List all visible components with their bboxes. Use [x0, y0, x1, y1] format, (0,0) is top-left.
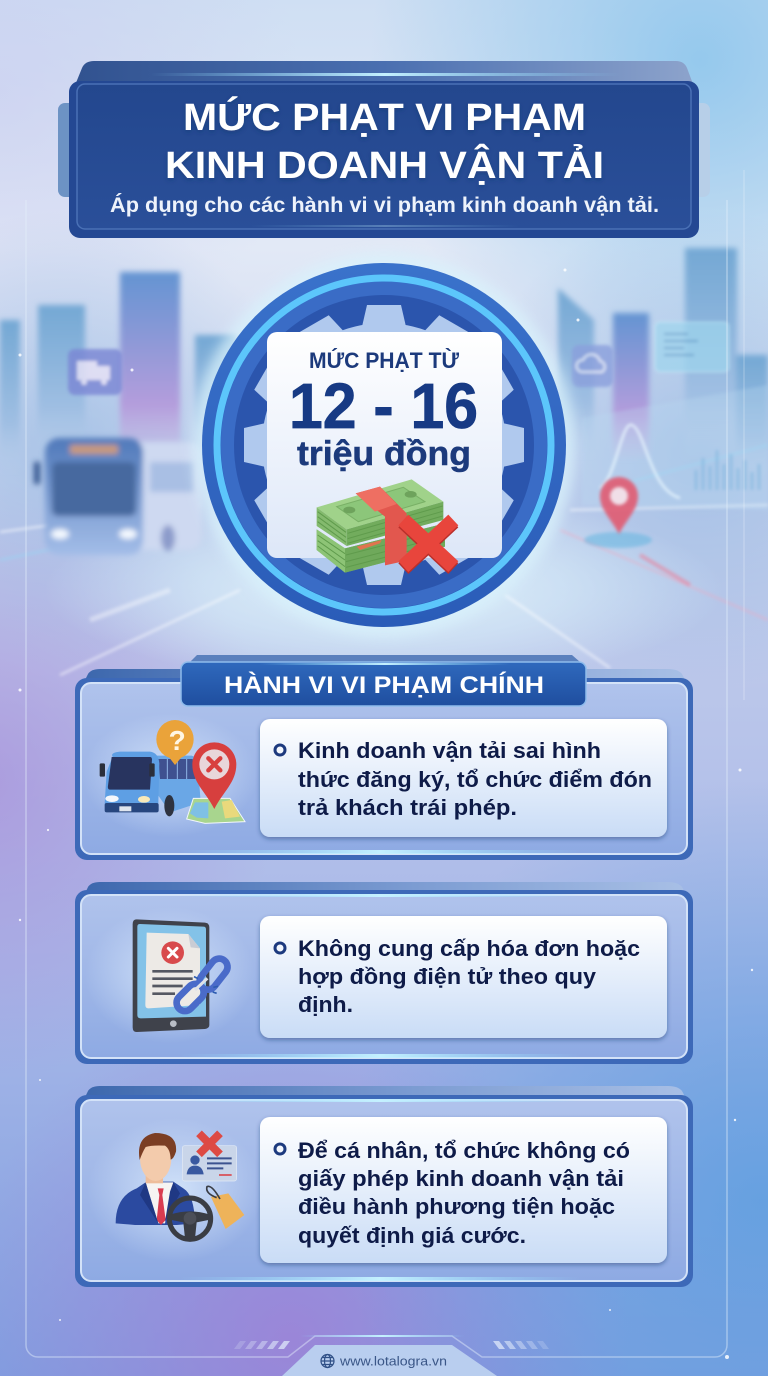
- icon: bus with question bubble and location pin: [100, 720, 245, 823]
- icon: gear: [244, 305, 524, 585]
- background icon tile: truck: [68, 349, 122, 395]
- icon: driver with revoked licence, steering wheel and price tag: [116, 1133, 244, 1239]
- subtitle: Áp dụng cho các hành vi vi phạm kinh doanh vận tải.: [110, 194, 659, 217]
- title panel: [58, 61, 710, 238]
- blurred bus in the background: [34, 438, 202, 555]
- text box 1: trả khách trái phép.: [298, 795, 517, 820]
- text box 2: [260, 916, 667, 1038]
- fine amount card: [267, 332, 502, 558]
- text box 3: quyết định giá cước.: [298, 1223, 526, 1248]
- text box 2: định.: [298, 992, 353, 1017]
- background map pin: [584, 477, 652, 548]
- background data panel: [655, 322, 729, 372]
- text box 3: Để cá nhân, tổ chức không có: [298, 1138, 630, 1163]
- text box 1: [260, 719, 667, 837]
- background icon tile: cloud: [572, 345, 613, 387]
- fine amount value: 12 - 16: [289, 370, 478, 442]
- icon: bus with question bubble and location pin: ?: [169, 725, 186, 756]
- text box 1: thức đăng ký, tổ chức điểm đón: [298, 767, 652, 792]
- title text: KINH DOANH VẬN TẢI: [165, 143, 604, 187]
- panel: violation 2: [75, 882, 693, 1064]
- footer website text: www.lotalogra.vn: [339, 1354, 447, 1368]
- fine amount label: MỨC PHẠT TỪ: [309, 348, 460, 373]
- hash marks right: [493, 1341, 549, 1349]
- icon: tablet with rejected document and broken chain: [133, 919, 231, 1032]
- background chart with wave and bars: [582, 385, 768, 510]
- title text: [165, 95, 604, 187]
- icon: cash stack with red cross: [317, 479, 453, 573]
- text box 3: giấy phép kinh doanh vận tải: [298, 1166, 624, 1191]
- text box 3: điều hành phương tiện hoặc: [298, 1194, 615, 1219]
- text box 1: Kinh doanh vận tải sai hình: [298, 738, 601, 763]
- text box 2: Không cung cấp hóa đơn hoặc: [298, 936, 640, 961]
- fine amount unit: triệu đồng: [297, 435, 471, 473]
- footer tab: [234, 1335, 549, 1376]
- title text: MỨC PHẠT VI PHẠM: [183, 95, 586, 139]
- text box 2: hợp đồng điện tử theo quy: [298, 964, 597, 989]
- section banner: [181, 655, 586, 706]
- hash marks left: [234, 1341, 290, 1349]
- panel: violation 1: [75, 655, 693, 860]
- icon: globe: [321, 1354, 334, 1368]
- section banner: HÀNH VI VI PHẠM CHÍNH: [224, 671, 544, 699]
- text box 3: [260, 1117, 667, 1263]
- penalty medallion: [192, 253, 576, 637]
- panel: violation 3: [75, 1086, 693, 1287]
